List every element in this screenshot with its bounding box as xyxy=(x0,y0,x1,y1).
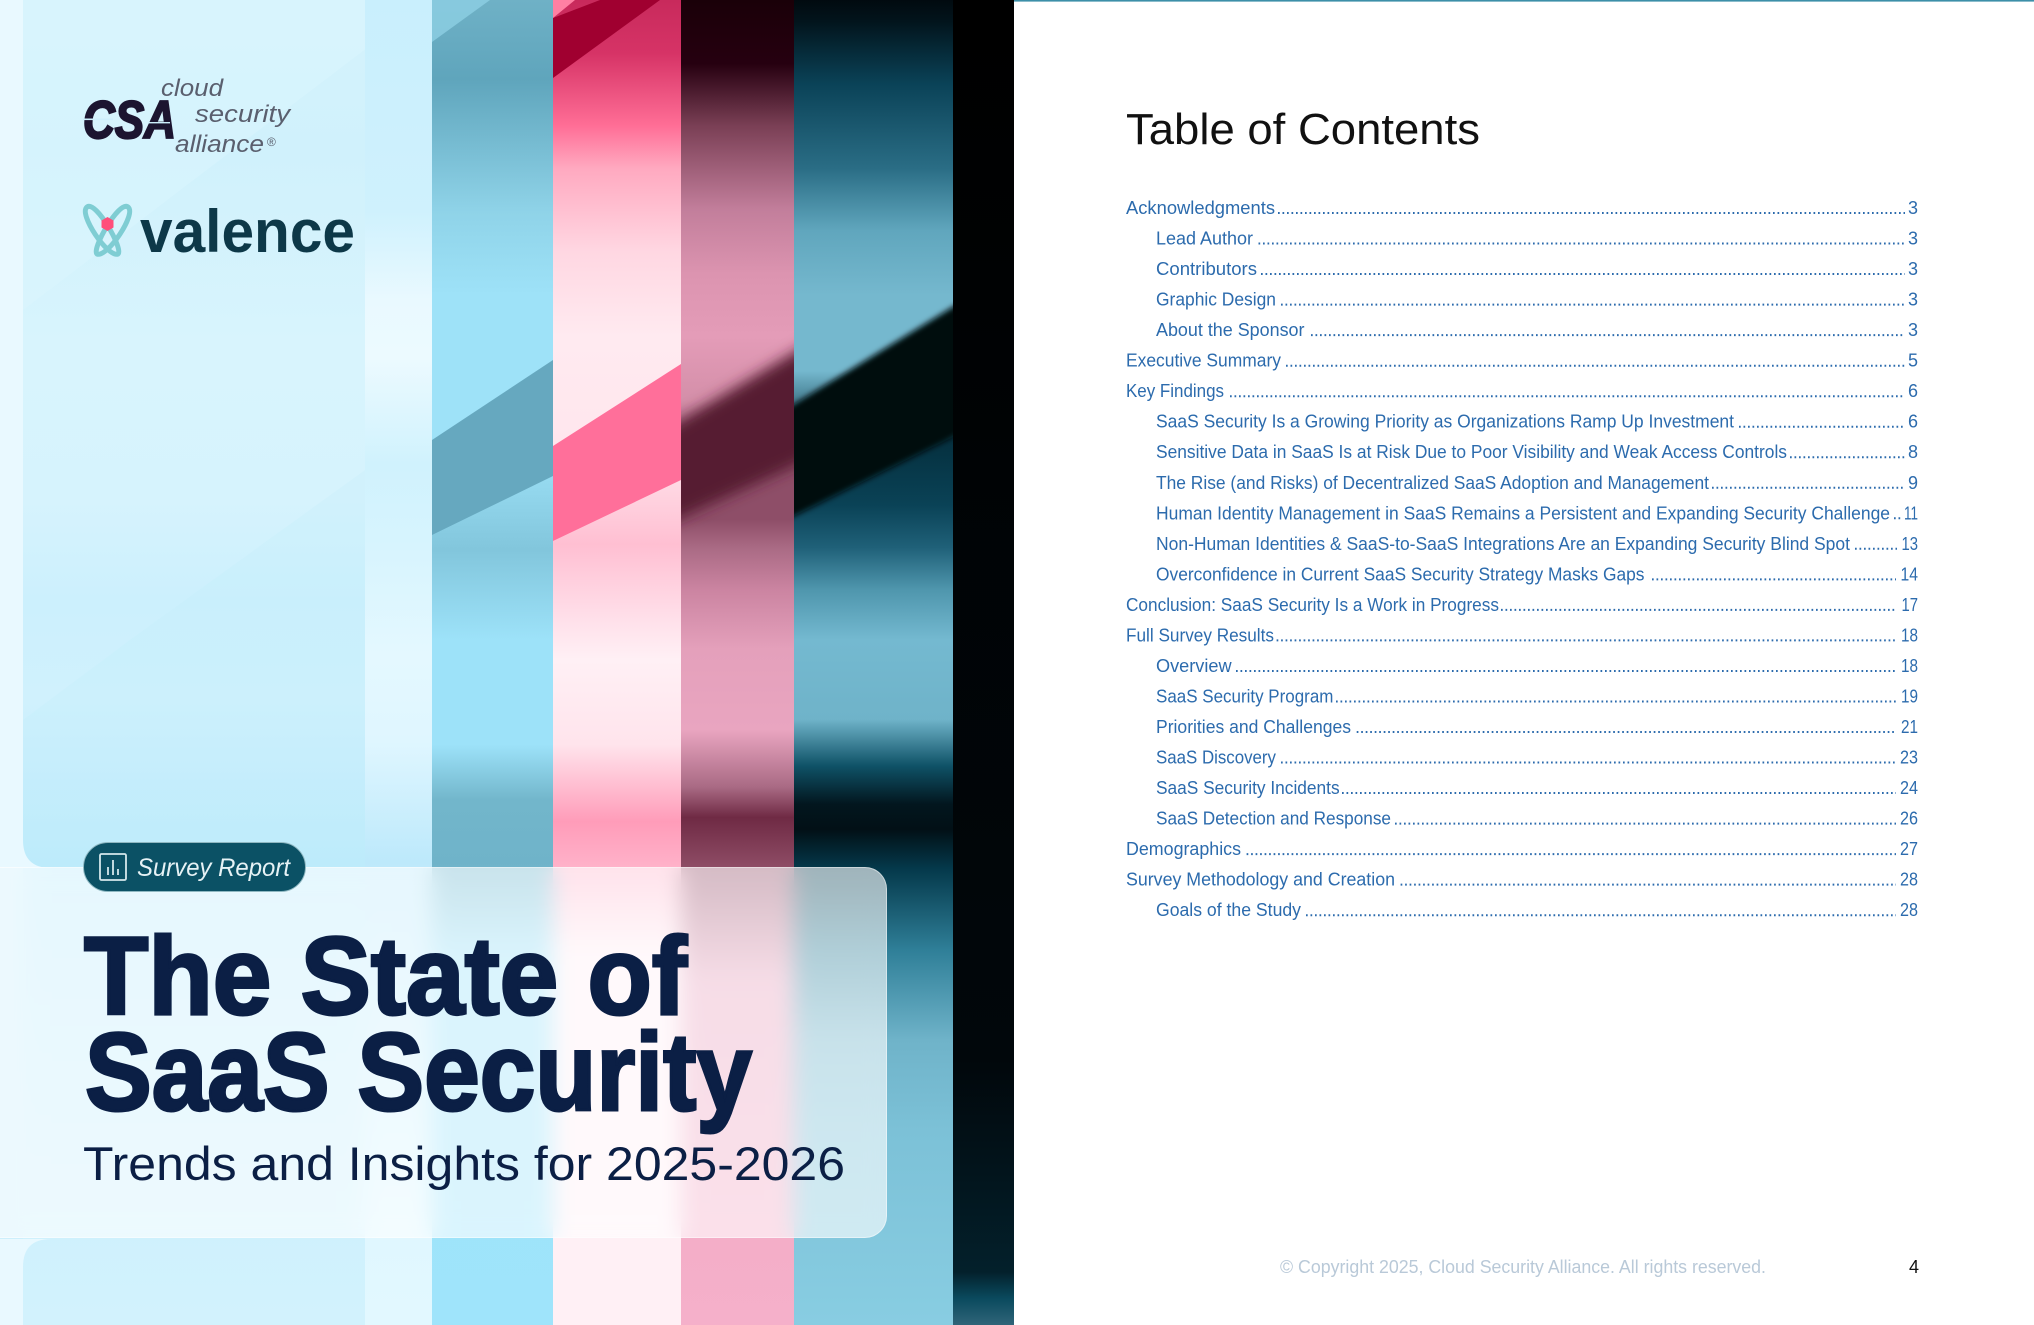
entry: Human Identity Management: 11 xyxy=(1904,503,1918,523)
entry: SaaS Security Program: 19 xyxy=(1901,686,1918,706)
entry: Overview xyxy=(1156,656,1918,676)
entry: SaaS Detection and Response: SaaS Detection and Response xyxy=(1156,809,1391,829)
entry: Overconfidence: Overconfidence in Current SaaS Security Strategy Masks Gaps xyxy=(1156,564,1644,584)
entry: Goals of the Study: Goals of the Study xyxy=(1156,900,1301,920)
footer: page number: 4 xyxy=(1909,1257,1919,1277)
frosted title panel xyxy=(0,867,887,1238)
entry: Lead Author xyxy=(1156,228,1918,248)
entry: Contributors xyxy=(1156,259,1918,279)
entry: Goals of the Study xyxy=(1156,900,1918,920)
logo: Cloud Security Alliance: security xyxy=(195,101,292,128)
entry: Demographics: Demographics xyxy=(1126,839,1241,859)
entry: Overconfidence: 14 xyxy=(1900,564,1918,584)
title: SaaS Security xyxy=(85,1011,752,1134)
entry: Key Findings: Key Findings xyxy=(1126,381,1224,401)
entry: Executive Summary: Executive Summary xyxy=(1126,351,1281,371)
entry: Acknowledgments: 3 xyxy=(1908,198,1918,218)
badge: Survey Report xyxy=(84,842,306,892)
entry: Survey Methodology and Creation xyxy=(1126,870,1918,890)
entry: The Rise (and Risks): The Rise (and Risks) of Decentralized SaaS Adoption and Management xyxy=(1156,473,1709,493)
logo: Cloud Security Alliance: cloud xyxy=(161,75,224,102)
subtitle: Trends and Insights for 2025-2026 xyxy=(83,1137,845,1190)
entry: SaaS Security Incidents xyxy=(1156,778,1918,798)
entry: Overview: Overview xyxy=(1156,656,1233,676)
entry: SaaS Discovery xyxy=(1156,748,1918,768)
entry: Priorities and Challenges: Priorities and Challenges xyxy=(1156,717,1351,737)
entry: Full Survey Results xyxy=(1126,625,1918,645)
entry: Sensitive Data in SaaS: 8 xyxy=(1908,442,1918,462)
entry: Survey Methodology and Creation: Survey Methodology and Creation xyxy=(1126,870,1395,890)
entry: Overconfidence xyxy=(1156,564,1918,584)
title: The State of xyxy=(84,915,687,1038)
table of contents list xyxy=(1126,198,1918,920)
entry: SaaS Security Incidents: SaaS Security Incidents xyxy=(1156,778,1340,798)
logo: Cloud Security Alliance: ® xyxy=(267,135,276,149)
entry: SaaS Security Is a Growing Priority: 6 xyxy=(1908,412,1918,432)
entry: Survey Methodology and Creation: 28 xyxy=(1900,870,1918,890)
entry: Contributors: Contributors xyxy=(1156,259,1257,279)
entry: Key Findings xyxy=(1126,381,1918,401)
entry: About the Sponsor: 3 xyxy=(1908,320,1918,340)
logo: Cloud Security Alliance: CSA xyxy=(83,91,176,150)
entry: Non-Human Identities: 13 xyxy=(1902,534,1918,554)
entry: Lead Author: Lead Author xyxy=(1156,228,1253,248)
entry: Graphic Design xyxy=(1156,290,1918,310)
entry: Acknowledgments: Acknowledgments xyxy=(1126,198,1275,218)
entry: Full Survey Results: 18 xyxy=(1901,625,1918,645)
entry: Lead Author: 3 xyxy=(1908,228,1918,248)
entry: SaaS Security Program: SaaS Security Program xyxy=(1156,686,1333,706)
entry: SaaS Detection and Response xyxy=(1156,809,1918,829)
entry: Non-Human Identities: Non-Human Identities & SaaS-to-SaaS Integrations Are an Expanding Security Blind Spot xyxy=(1156,534,1850,554)
entry: Demographics xyxy=(1126,839,1918,859)
logo: Cloud Security Alliance xyxy=(83,75,292,158)
entry: Sensitive Data in SaaS: Sensitive Data in SaaS Is at Risk Due to Poor Visibility and Weak Access Controls xyxy=(1156,442,1787,462)
entry: Priorities and Challenges: 21 xyxy=(1901,717,1918,737)
footer: copyright: © Copyright 2025, Cloud Security Alliance. All rights reserved. xyxy=(1280,1257,1766,1277)
entry: Acknowledgments xyxy=(1126,198,1918,218)
entry: SaaS Security Incidents: 24 xyxy=(1900,778,1918,798)
icon: bar chart xyxy=(100,854,126,880)
entry: Graphic Design: Graphic Design xyxy=(1156,290,1276,310)
logo: Cloud Security Alliance: alliance xyxy=(175,131,264,158)
icon: valence atom butterfly xyxy=(85,206,130,254)
entry: SaaS Discovery: SaaS Discovery xyxy=(1156,748,1276,768)
entry: About the Sponsor xyxy=(1156,320,1918,340)
entry: Priorities and Challenges xyxy=(1156,717,1918,737)
entry: Contributors: 3 xyxy=(1908,259,1918,279)
entry: About the Sponsor: About the Sponsor xyxy=(1156,320,1305,340)
entry: SaaS Security Is a Growing Priority: SaaS Security Is a Growing Priority as Organizations Ramp Up Investment xyxy=(1156,412,1734,432)
heading: Table of Contents: Table of Contents xyxy=(1126,105,1480,154)
logo: valence: valence xyxy=(140,198,355,265)
entry: Conclusion: Conclusion: SaaS Security Is a Work in Progress xyxy=(1126,595,1499,615)
entry: SaaS Detection and Response: 26 xyxy=(1900,809,1918,829)
entry: SaaS Security Program xyxy=(1156,686,1918,706)
entry: The Rise (and Risks): 9 xyxy=(1908,473,1918,493)
entry: Conclusion: 17 xyxy=(1902,595,1918,615)
title xyxy=(84,915,752,1134)
badge: Survey Report: Survey Report xyxy=(137,854,291,882)
entry: Full Survey Results: Full Survey Results xyxy=(1126,625,1274,645)
entry: Demographics: 27 xyxy=(1900,839,1918,859)
entry: Graphic Design: 3 xyxy=(1908,290,1918,310)
entry: Executive Summary xyxy=(1126,351,1918,371)
entry: Key Findings: 6 xyxy=(1908,381,1918,401)
entry: Human Identity Management: Human Identity Management in SaaS Remains a Persistent and Expanding Security Challenge xyxy=(1156,503,1890,523)
entry: Executive Summary: 5 xyxy=(1908,351,1918,371)
entry: Conclusion xyxy=(1126,595,1918,615)
entry: SaaS Discovery: 23 xyxy=(1900,748,1918,768)
entry: Goals of the Study: 28 xyxy=(1900,900,1918,920)
entry: Overview: 18 xyxy=(1901,656,1918,676)
